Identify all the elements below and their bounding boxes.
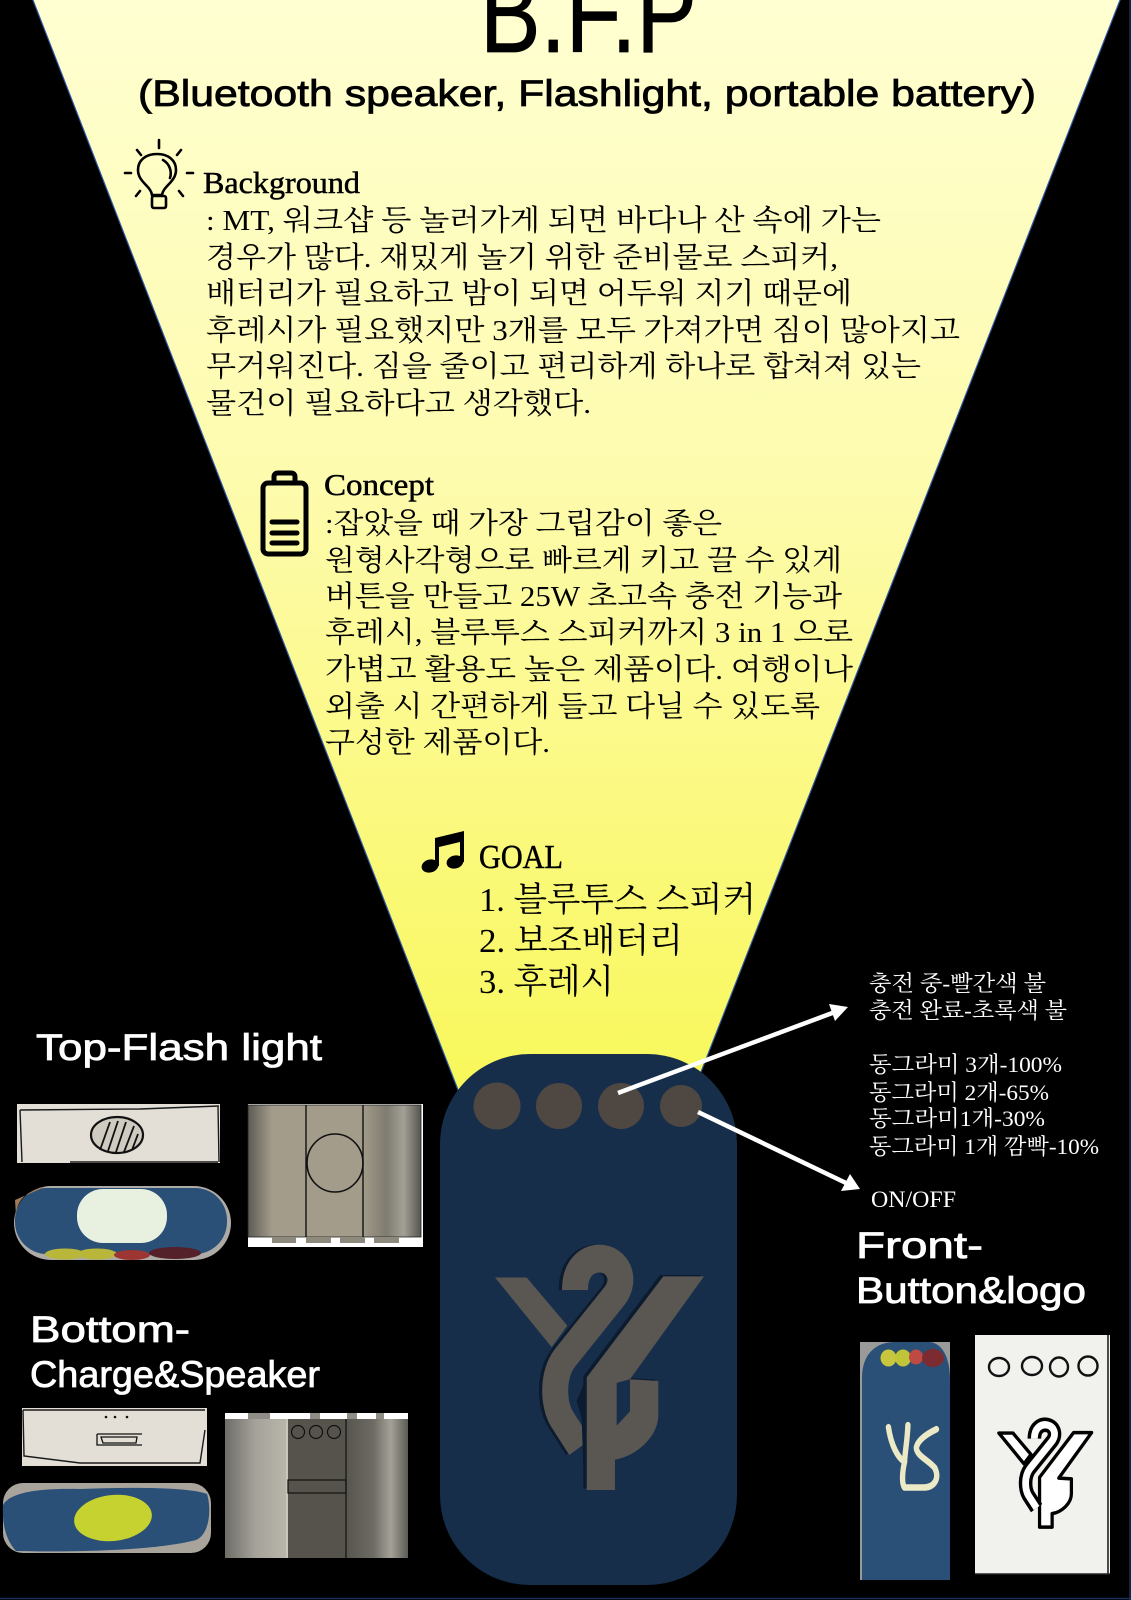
arrow: to status text xyxy=(618,1004,848,1093)
status text block: 동그라미 1개 깜빡-10% xyxy=(869,1134,1099,1159)
sketch: bottom view xyxy=(22,1408,207,1466)
heading: top flash light: Top-Flash light xyxy=(36,1027,323,1068)
concept body text: :잡았을 때 가장 그립감이 좋은 xyxy=(325,507,722,540)
background text block xyxy=(203,165,960,420)
heading: front button and logo: Front- xyxy=(856,1225,983,1266)
concept body text: 구성한 제품이다. xyxy=(325,726,550,759)
goal list: 3. 후레시 xyxy=(479,963,614,1001)
icon: music note xyxy=(420,831,465,874)
heading: front button and logo xyxy=(856,1225,1086,1311)
background body text: 후레시가 필요했지만 3개를 모두 가져가면 짐이 많아지고 xyxy=(206,314,960,347)
goal list: 1. 블루투스 스피커 xyxy=(479,881,756,919)
concept text block xyxy=(324,467,853,759)
sketch: front view xyxy=(975,1335,1110,1574)
arrow: to on/off xyxy=(698,1112,860,1191)
indicator buttons xyxy=(474,1082,702,1130)
photo: clay top view xyxy=(14,1186,231,1260)
background heading: Background xyxy=(203,165,361,200)
on/off label: ON/OFF xyxy=(871,1187,956,1212)
concept body text: 후레시, 블루투스 스피커까지 3 in 1 으로 xyxy=(325,616,853,649)
sketch: top view xyxy=(17,1104,220,1163)
device logo xyxy=(495,1259,704,1490)
icon: light bulb xyxy=(125,140,193,208)
background body text: : MT, 워크샵 등 놀러가게 되면 바다나 산 속에 가는 xyxy=(206,204,881,237)
concept body text xyxy=(325,507,853,759)
icon: battery xyxy=(263,473,306,554)
background body text: 무거워진다. 짐을 줄이고 편리하게 하나로 합쳐져 있는 xyxy=(206,350,921,383)
heading: bottom charge and speaker: Bottom- xyxy=(30,1309,190,1350)
heading: bottom charge and speaker: Charge&Speaker xyxy=(30,1354,320,1395)
render: bottom view xyxy=(225,1413,408,1558)
heading: bottom charge and speaker xyxy=(30,1309,320,1395)
status text block: 동그라미1개-30% xyxy=(869,1106,1045,1131)
background body text: 물건이 필요하다고 생각했다. xyxy=(206,387,591,420)
status text block: 충전 중-빨간색 불 xyxy=(869,971,1046,996)
subtitle: (Bluetooth speaker, Flashlight, portable battery) xyxy=(138,73,1036,114)
photo: clay front view xyxy=(860,1342,950,1580)
photo: clay bottom view xyxy=(3,1483,211,1553)
status text block: 충전 완료-초록색 불 xyxy=(869,998,1067,1023)
concept body text: 버튼을 만들고 25W 초고속 충전 기능과 xyxy=(325,580,842,613)
goal list xyxy=(479,881,756,1001)
status text block xyxy=(869,971,1099,1159)
device body xyxy=(440,1054,737,1585)
clay buttons xyxy=(880,1349,944,1367)
clay logo xyxy=(888,1425,937,1488)
background body text xyxy=(206,204,960,420)
goal text block xyxy=(479,839,756,1001)
concept body text: 원형사각형으로 빠르게 키고 끌 수 있게 xyxy=(325,544,842,577)
concept heading: Concept xyxy=(324,467,434,502)
concept body text: 외출 시 간편하게 들고 다닐 수 있도록 xyxy=(325,690,820,723)
goal heading: GOAL xyxy=(479,839,563,876)
goal list: 2. 보조배터리 xyxy=(479,922,683,960)
concept body text: 가볍고 활용도 높은 제품이다. 여행이나 xyxy=(325,653,853,686)
render: top view xyxy=(248,1104,423,1247)
background body text: 경우가 많다. 재밌게 놀기 위한 준비물로 스피커, xyxy=(206,241,838,274)
background body text: 배터리가 필요하고 밤이 되면 어두워 지기 때문에 xyxy=(206,277,852,310)
status text block: 동그라미 3개-100% xyxy=(869,1052,1062,1077)
sketch logo xyxy=(999,1425,1092,1527)
status text block: 동그라미 2개-65% xyxy=(869,1080,1049,1105)
heading: front button and logo: Button&logo xyxy=(856,1270,1086,1311)
product: front device xyxy=(440,1054,737,1585)
sketch buttons xyxy=(989,1356,1098,1376)
flashlight beam xyxy=(31,0,1122,1095)
